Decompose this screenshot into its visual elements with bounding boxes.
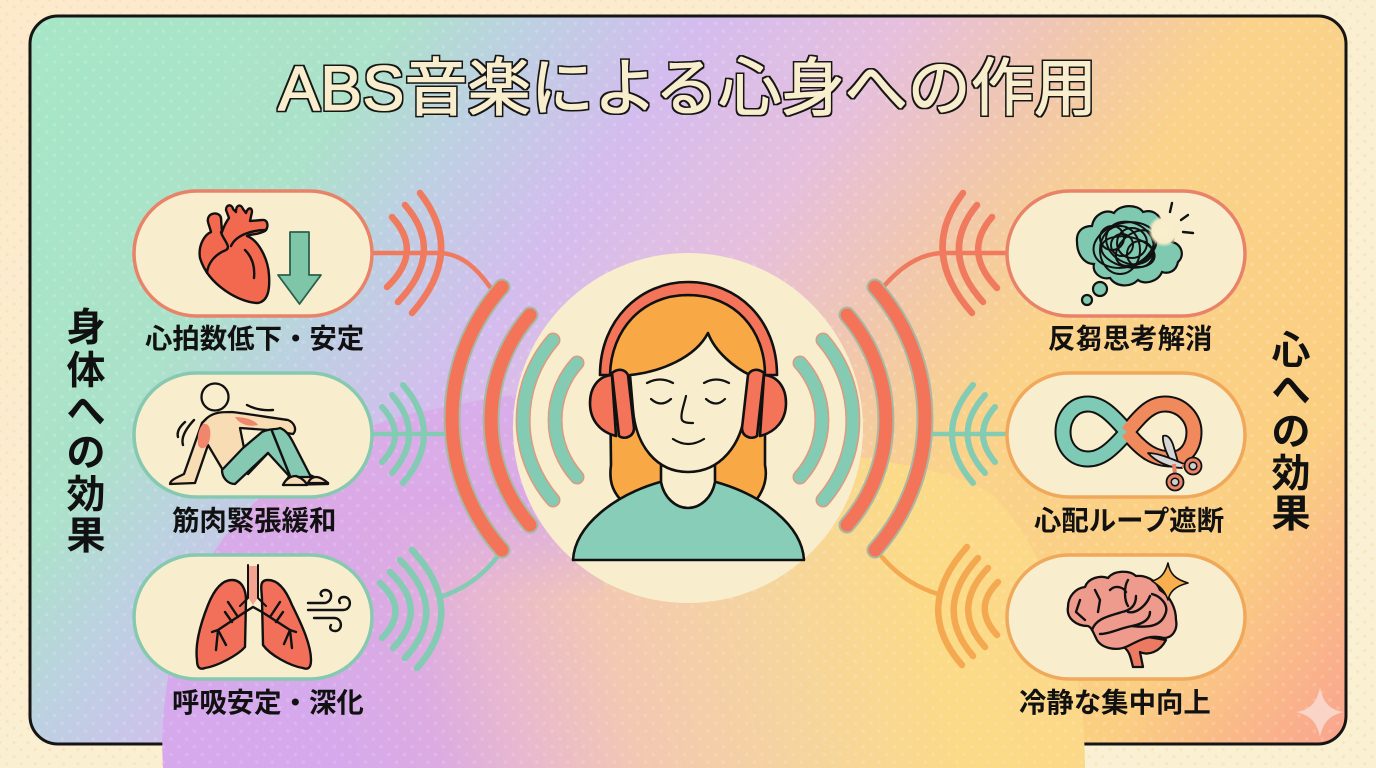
sparkle bbox=[1296, 687, 1344, 737]
pill: worry loop bbox=[1007, 373, 1245, 497]
centre circle bbox=[513, 253, 863, 603]
pill: focus bbox=[1007, 555, 1245, 679]
person with headphones bbox=[573, 282, 804, 560]
connector waves: worry loop bbox=[932, 385, 1007, 483]
pill: rumination bbox=[1007, 191, 1245, 316]
icon: infinity loop and scissors bbox=[1063, 404, 1202, 490]
heading: mind effects: の bbox=[1271, 411, 1311, 454]
connector waves: rumination bbox=[885, 193, 1007, 313]
pill: heart rate bbox=[134, 191, 372, 316]
heading: mind effects: 効 bbox=[1271, 453, 1311, 496]
heading: body effects: 果 bbox=[66, 515, 106, 558]
heading: mind effects: 果 bbox=[1271, 493, 1311, 536]
label: breathing: 呼吸安定・深化 bbox=[172, 687, 364, 718]
pill: muscle relaxation bbox=[134, 373, 372, 497]
icon: tangled thought cloud bbox=[1077, 203, 1193, 305]
label: rumination: 反芻思考解消 bbox=[1048, 323, 1212, 354]
connector waves: muscle bbox=[372, 385, 452, 483]
heading: body effects: 身 bbox=[66, 307, 106, 350]
heading: mind effects: 心 bbox=[1271, 330, 1311, 373]
sound rings right bbox=[800, 287, 925, 550]
icon: lungs bbox=[197, 565, 350, 669]
eyebrows, eyes, nose, mouth bbox=[647, 380, 729, 444]
sound rings left bbox=[452, 287, 577, 550]
icon: brain and star bbox=[1068, 563, 1188, 667]
heading: mind effects: へ bbox=[1271, 370, 1311, 413]
headband bbox=[600, 282, 777, 375]
icon: down arrow bbox=[278, 232, 321, 304]
label: muscle relaxation: 筋肉緊張緩和 bbox=[172, 505, 336, 536]
right ear cup bbox=[760, 375, 786, 436]
heading: body effects: 体 bbox=[66, 350, 106, 393]
hair bbox=[610, 295, 766, 499]
neck bbox=[661, 455, 715, 508]
title: ABS音楽による心身への作用 bbox=[278, 54, 1097, 124]
face bbox=[630, 333, 750, 472]
soft colour blob bbox=[162, 385, 1085, 768]
label: focus: 冷静な集中向上 bbox=[1019, 687, 1211, 718]
icon: sitting person bbox=[170, 384, 328, 485]
connector waves: heart bbox=[372, 193, 490, 313]
pill: breathing bbox=[134, 555, 372, 679]
left ear cup bbox=[590, 375, 616, 436]
label: heart rate: 心拍数低下・安定 bbox=[145, 323, 364, 354]
shirt bbox=[573, 482, 804, 560]
heading: body effects: へ bbox=[66, 391, 106, 434]
connector waves: breathing bbox=[380, 550, 498, 668]
connector waves: focus bbox=[882, 547, 998, 665]
label: worry loop: 心配ループ遮断 bbox=[1034, 505, 1224, 536]
heading: body effects: 効 bbox=[66, 474, 106, 517]
heading: body effects: の bbox=[66, 432, 106, 475]
icon: heart bbox=[200, 205, 269, 303]
